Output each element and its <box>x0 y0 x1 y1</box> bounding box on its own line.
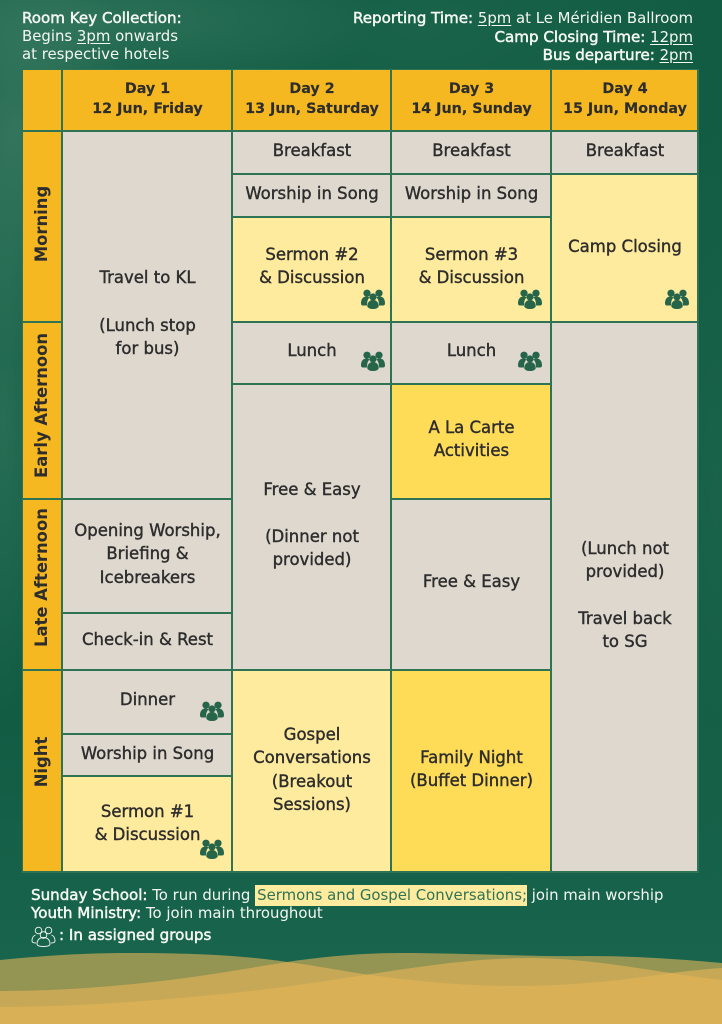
header note: reporting and closing times <box>353 9 693 64</box>
header note: reporting and closing times: Bus departure: 2pm <box>543 46 693 64</box>
row label: Morning <box>22 131 63 323</box>
day 2: breakfast: Breakfast <box>273 141 351 160</box>
day 3: a la carte activities: A La Carte <box>428 418 515 437</box>
day 3: family night: (Buffet Dinner) <box>410 771 533 790</box>
row label: Night: Night <box>32 736 51 787</box>
day 3: family night: Family Night <box>420 748 523 767</box>
day 4: travel back: Travel back <box>578 609 672 628</box>
row label: Late Afternoon: Late Afternoon <box>32 508 51 647</box>
day 1: travel to KL: (Lunch stop <box>99 316 196 335</box>
day 2: free and easy <box>232 384 392 671</box>
icon: group, day 3 lunch <box>518 352 542 371</box>
day 2: gospel conversations: (Breakout <box>272 772 352 791</box>
day 1: opening worship <box>62 499 233 614</box>
day 1: dinner: Dinner <box>120 690 175 709</box>
header: Day 3 <box>391 69 552 132</box>
header: Day 2 <box>232 69 392 132</box>
day 2: free and easy: Free & Easy <box>263 480 361 499</box>
icon: group, sermon 3 <box>518 290 542 309</box>
day 1: dinner <box>62 670 233 735</box>
day 3: a la carte activities: Activities <box>434 441 509 460</box>
day 1: sermon 1 <box>62 776 233 873</box>
header: Day 1 <box>62 69 233 132</box>
day 2: sermon 2 <box>232 217 392 323</box>
day 4: breakfast <box>551 131 699 175</box>
icon: outline group <box>32 926 56 947</box>
day 4: travel back: provided) <box>586 562 664 581</box>
day 1: worship in song: Worship in Song <box>81 744 214 763</box>
day 4: camp closing: Camp Closing <box>568 237 682 256</box>
icon: group, sermon 2 <box>361 290 385 309</box>
day 3: sermon 3 <box>391 217 552 323</box>
header: Day 4: 15 Jun, Monday <box>563 100 687 116</box>
day 2: free and easy: (Dinner not <box>265 527 359 546</box>
day 1: worship in song <box>62 734 233 777</box>
day 1: opening worship: Briefing & <box>106 544 189 563</box>
day 1: opening worship: Opening Worship, <box>74 521 221 540</box>
day 3: lunch: Lunch <box>447 341 496 360</box>
legend: assigned groups <box>32 926 211 947</box>
day 1: travel to KL: Travel to KL <box>99 268 196 287</box>
header note: room key collection: Begins 3pm onwards <box>22 27 178 45</box>
day 3: worship in song: Worship in Song <box>405 184 538 203</box>
header note: room key collection <box>22 9 182 63</box>
day 3: worship in song <box>391 174 552 218</box>
footnote: youth ministry: Youth Ministry: To join main throughout <box>31 904 323 922</box>
decorative hills at bottom <box>0 953 722 1024</box>
header note: reporting and closing times: Reporting Time: 5pm at Le Méridien Ballroom <box>353 9 693 27</box>
day 2: sermon 2: Sermon #2 <box>265 245 359 264</box>
day 2: worship in song: Worship in Song <box>245 184 379 203</box>
day 3: a la carte activities <box>391 384 552 500</box>
day 2: worship in song <box>232 174 392 218</box>
icon: group, sermon 1 <box>200 840 224 859</box>
day 2: breakfast <box>232 131 392 175</box>
day 1: check-in and rest: Check-in & Rest <box>82 630 213 649</box>
day 2: lunch <box>232 322 392 385</box>
day 2: gospel conversations: Conversations <box>253 748 371 767</box>
day 1: travel to KL <box>62 131 233 500</box>
day 4: travel back: to SG <box>602 632 648 651</box>
header: Day 4: Day 4 <box>602 81 648 97</box>
day 1: travel to KL: for bus) <box>116 339 179 358</box>
header note: room key collection: at respective hotels <box>22 45 169 63</box>
day 3: family night <box>391 670 552 873</box>
row label: Night <box>22 670 63 873</box>
day 2: lunch: Lunch <box>287 341 337 360</box>
day 4: travel back <box>551 322 699 873</box>
day 2: gospel conversations <box>232 670 392 873</box>
day 3: lunch <box>391 322 552 385</box>
legend text: : In assigned groups <box>59 926 211 944</box>
day 2: gospel conversations: Gospel <box>284 725 340 744</box>
header note: reporting and closing times: Camp Closing Time: 12pm <box>494 28 693 46</box>
icon: group, dinner <box>200 702 224 721</box>
row label: Early Afternoon: Early Afternoon <box>32 333 51 478</box>
icon: group, camp closing <box>665 290 689 309</box>
day 3: free and easy: Free & Easy <box>423 572 520 591</box>
table corner cell <box>22 69 63 132</box>
day 2: sermon 2: & Discussion <box>259 268 365 287</box>
header: Day 3: 14 Jun, Sunday <box>411 100 532 116</box>
day 2: gospel conversations: Sessions) <box>273 795 351 814</box>
footnote: sunday school: Sunday School: To run during Sermons and Gospel Conversations; join main worship <box>31 886 663 904</box>
header: Day 2: 13 Jun, Saturday <box>245 100 379 116</box>
day 4: camp closing <box>551 174 699 323</box>
day 3: sermon 3: Sermon #3 <box>425 245 518 264</box>
header: Day 1: Day 1 <box>125 81 170 97</box>
header: Day 2: Day 2 <box>289 81 335 97</box>
row label: Early Afternoon <box>22 322 63 500</box>
day 3: breakfast <box>391 131 552 175</box>
day 1: sermon 1: Sermon #1 <box>101 802 194 821</box>
day 4: travel back: (Lunch not <box>581 539 669 558</box>
day 3: breakfast: Breakfast <box>432 141 511 160</box>
day 1: sermon 1: & Discussion <box>95 825 200 844</box>
day 2: free and easy: provided) <box>273 550 351 569</box>
row label: Late Afternoon <box>22 499 63 671</box>
day 3: free and easy <box>391 499 552 671</box>
header note: room key collection: Room Key Collection: <box>22 9 182 27</box>
icon: group, day 2 lunch <box>361 352 385 371</box>
header: Day 1: 12 Jun, Friday <box>92 100 203 116</box>
header: Day 4 <box>551 69 699 132</box>
day 3: sermon 3: & Discussion <box>419 268 524 287</box>
day 4: breakfast: Breakfast <box>586 141 664 160</box>
row label: Morning: Morning <box>32 186 51 262</box>
header: Day 3: Day 3 <box>449 81 494 97</box>
day 1: opening worship: Icebreakers <box>100 568 195 587</box>
day 1: check-in and rest <box>62 613 233 671</box>
schedule table <box>22 69 699 873</box>
